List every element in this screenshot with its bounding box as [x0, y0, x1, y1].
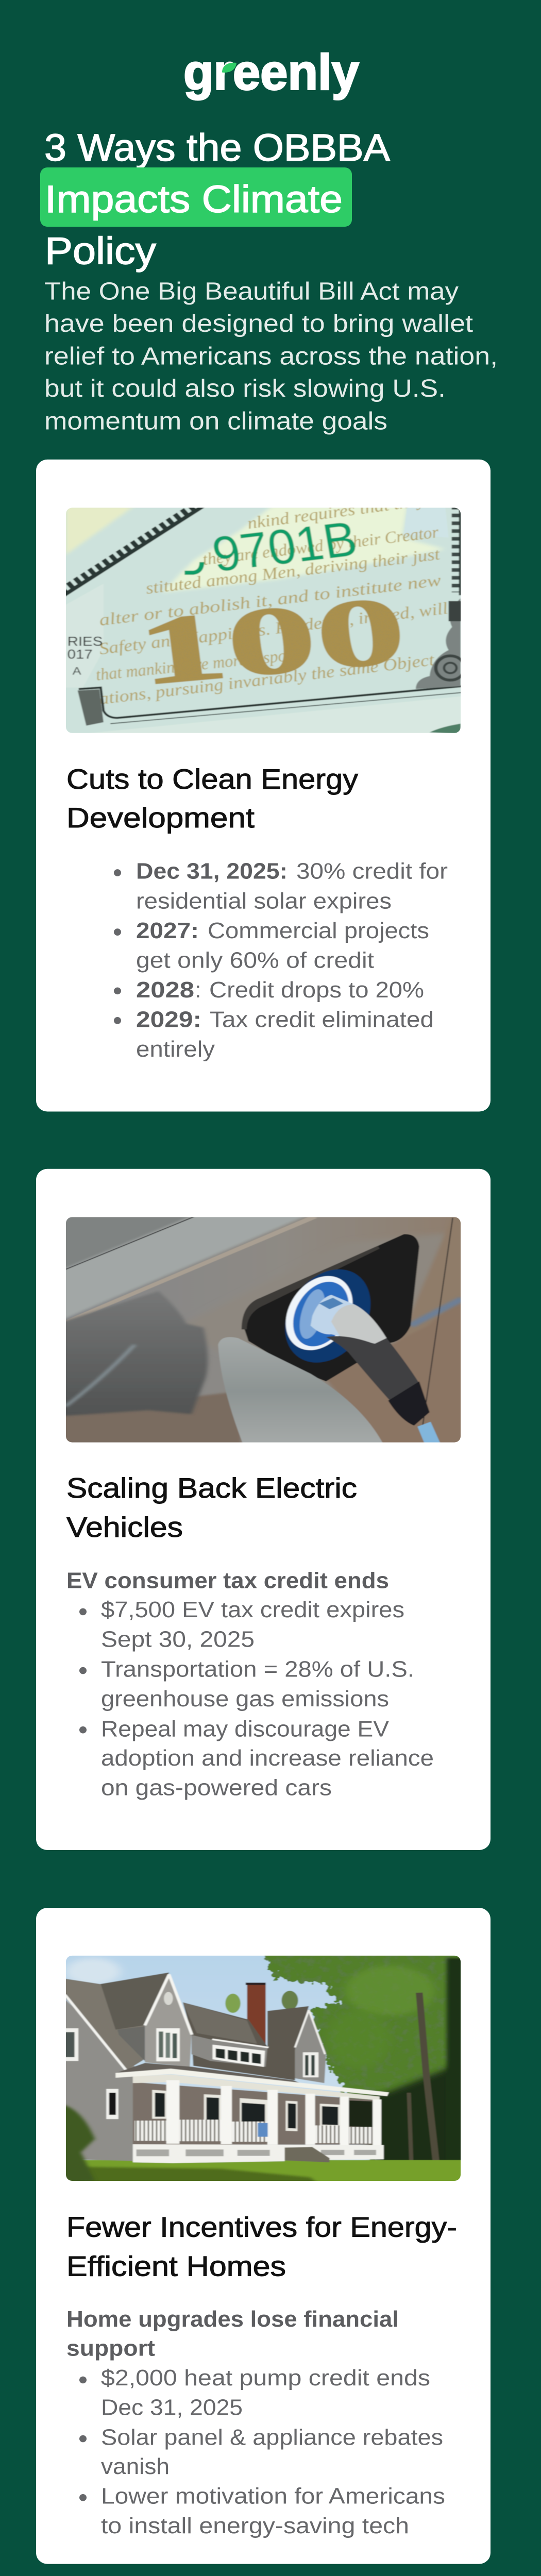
bullet list: credit timeline: Credit drops to 20%: [209, 977, 424, 1003]
bullet list: EV credit: $7,500 EV tax credit expires: [101, 1598, 404, 1622]
bullet list: credit timeline: 2029:: [136, 1007, 201, 1032]
panel: cuts to clean energy development: [36, 460, 491, 1111]
left bush: [62, 2104, 95, 2183]
subheading: [66, 2307, 399, 2361]
intro text: The One Big Beautiful Bill Act may: [44, 278, 459, 305]
sawtooth border right: [451, 508, 460, 593]
photo: hundred dollar bill: A: [73, 665, 81, 677]
bullet list: credit timeline: 30% credit for: [296, 859, 448, 884]
title: [40, 126, 390, 272]
subheading: Home upgrades lose financial: [66, 2307, 399, 2332]
bullet list: home upgrades: [79, 2366, 445, 2538]
title: Policy: [45, 229, 156, 272]
towel: [258, 2123, 268, 2137]
bullet list: credit timeline: 2027:: [136, 918, 199, 943]
script text: nkind requires that they: [246, 490, 427, 533]
bullet list: EV credit: on gas-powered cars: [101, 1775, 332, 1800]
photo: hundred dollar bill: ations, pursuing invariably the same Object: [97, 650, 436, 708]
right gable: [295, 2009, 326, 2083]
base skirt: [133, 2144, 384, 2163]
mirror shape: [62, 1291, 208, 1416]
intro text: [44, 278, 498, 435]
bullet list: EV credit: adoption and increase reliance: [101, 1745, 434, 1771]
panel: scaling back electric vehicles: [36, 1169, 491, 1850]
photo: hundred dollar bill: alter or to abolish it, and to institute new: [97, 570, 443, 629]
gold 100: 100: [131, 575, 412, 706]
logo: greenly: greenly: [183, 44, 359, 100]
photo: hundred dollar bill: they are endowed by their Creator: [201, 522, 441, 569]
heading: [66, 764, 358, 834]
floor reflection: [62, 1391, 242, 1445]
photo: hundred dollar bill: [66, 508, 461, 733]
sawtooth border top-left: [64, 506, 204, 595]
panel: fewer incentives for energy-efficient homes: [36, 1908, 491, 2564]
railings: [134, 2121, 166, 2141]
bullet list: home upgrades: Dec 31, 2025: [101, 2395, 243, 2420]
intro text: but it could also risk slowing U.S.: [44, 375, 446, 402]
bullet list: credit timeline: Tax credit eliminated: [210, 1007, 434, 1032]
heading: Development: [66, 802, 255, 834]
columns: [166, 2080, 381, 2146]
charger connector: [310, 1294, 375, 1344]
bullet list: home upgrades: Lower motivation for Americans: [101, 2484, 445, 2509]
porch roof: [133, 2074, 380, 2100]
bullet list: home upgrades: Solar panel & appliance rebates: [101, 2425, 443, 2450]
blue light ring: [284, 1269, 371, 1363]
steps: [285, 2147, 330, 2162]
photo: EV charging port: [62, 1214, 466, 1445]
back roof: [183, 2002, 309, 2080]
bullet list: credit timeline: residential solar expires: [136, 889, 392, 913]
porch wall: [133, 2082, 380, 2145]
subheading: support: [66, 2336, 155, 2361]
bullet list: EV credit: Sept 30, 2025: [101, 1627, 255, 1652]
ornament bottom right: [416, 598, 461, 689]
bullet list: EV credit: [79, 1598, 434, 1800]
bullet list: home upgrades: $2,000 heat pump credit ends: [101, 2366, 430, 2391]
bullet list: credit timeline: Dec 31, 2025:: [136, 859, 288, 884]
photo: hundred dollar bill: that mankind are more disposed: [94, 643, 310, 684]
heading: [66, 1472, 357, 1543]
bullet list: credit timeline: 2028: [136, 977, 194, 1003]
dormer: [192, 2035, 267, 2067]
photo: hundred dollar bill: 017: [67, 647, 93, 662]
bottom border lines: [79, 686, 462, 718]
charge door flap: [218, 1337, 384, 1445]
heading: Fewer Incentives for Energy-: [66, 2211, 457, 2243]
icon: green leaf on the r: [222, 63, 236, 73]
series label: RIES: [67, 634, 103, 649]
chimney: [247, 1984, 266, 2045]
heading: Efficient Homes: [66, 2250, 286, 2282]
charging cable: [417, 1422, 441, 1445]
title highlight: green box: [40, 167, 352, 227]
title: Impacts Climate: [45, 178, 343, 221]
photo: house with porch: [66, 1956, 461, 2181]
bullet list: EV credit: Repeal may discourage EV: [101, 1717, 389, 1741]
heading: [66, 2211, 457, 2282]
lawn: [71, 2160, 461, 2181]
port opening: [243, 1234, 419, 1381]
intro text: relief to Americans across the nation,: [44, 343, 498, 370]
gable window: [156, 2028, 180, 2061]
photo: hundred dollar bill: Safety and Happiness. Prudence, indeed, will: [97, 599, 449, 658]
gable: [145, 1975, 192, 2067]
title: 3 Ways the OBBBA: [44, 126, 390, 169]
intro text: have been designed to bring wallet: [44, 310, 474, 337]
main roof: [66, 1975, 154, 2069]
heading: Cuts to Clean Energy: [66, 764, 358, 795]
bullet list: home upgrades: vanish: [101, 2454, 170, 2479]
charger handle: [326, 1336, 419, 1401]
bullet list: EV credit: greenhouse gas emissions: [101, 1686, 389, 1711]
heading: Vehicles: [66, 1512, 183, 1543]
heading: Scaling Back Electric: [66, 1472, 357, 1504]
bullet list: credit timeline: :: [195, 977, 201, 1003]
left wall: [66, 1999, 135, 2161]
bullet list: EV credit: Transportation = 28% of U.S.: [101, 1657, 414, 1682]
bullet list: credit timeline: get only 60% of credit: [136, 948, 375, 973]
trees: [263, 1956, 461, 2161]
subheading: EV consumer tax credit ends: [66, 1568, 389, 1593]
serial number: 9701B: [208, 511, 361, 582]
photo: hundred dollar bill: stituted among Men, deriving their just: [144, 545, 442, 598]
left windows: [106, 2089, 119, 2119]
bullet list: home upgrades: to install energy-saving tech: [101, 2514, 409, 2538]
bullet list: credit timeline: [114, 859, 448, 1062]
bullet list: credit timeline: entirely: [136, 1037, 215, 1062]
intro text: momentum on climate goals: [44, 408, 387, 435]
porch windows: [152, 2090, 340, 2131]
bullet list: credit timeline: Commercial projects: [208, 918, 429, 943]
lower roof: [117, 2063, 300, 2083]
